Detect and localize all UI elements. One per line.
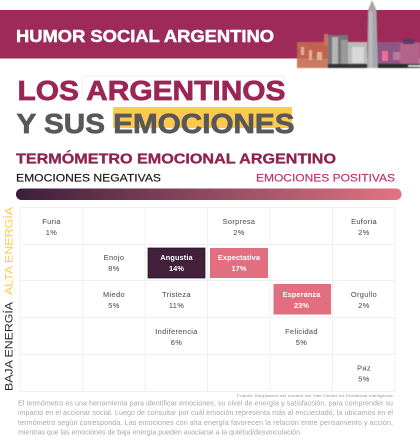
cell: Sorpresa: 2%: [233, 228, 245, 237]
axis label: high energy: ALTA ENERGÍA: [2, 206, 16, 295]
cell: Tristeza: [162, 290, 191, 310]
explanatory paragraph: impacto en el accionar social. Luego de consultar por cuál emoción representa más al encuestado, la ubicamos en el: [18, 409, 393, 417]
main title line 2: Y SUS EMOCIONES: [16, 108, 294, 139]
icon: Buenos Aires skyline with obelisk: [297, 0, 420, 68]
cell: Expectativa: [210, 248, 268, 278]
cell: Indiferencia: [155, 327, 198, 347]
label: negative emotions: EMOCIONES NEGATIVAS: [16, 172, 161, 184]
cell: Esperanza: [274, 284, 331, 314]
cell: Miedo: [103, 290, 125, 310]
cell: Paz: 5%: [358, 374, 370, 384]
cell: Euforia: 2%: [358, 228, 370, 237]
cell: Felicidad: Felicidad: [285, 327, 318, 336]
cell: Esperanza: 23%: [294, 301, 309, 310]
cell: Indiferencia: Indiferencia: [155, 327, 198, 336]
section heading: TERMÓMETRO EMOCIONAL ARGENTINO: [16, 150, 336, 168]
header title: HUMOR SOCIAL ARGENTINO: [16, 26, 274, 46]
cell: Angustia: Angustia: [160, 253, 193, 262]
cell: Angustia: [148, 248, 205, 278]
cell: Expectativa: Expectativa: [218, 253, 261, 262]
cell: Enojo: Enojo: [104, 253, 124, 262]
axis label: low energy: BAJA ENERGÍA: [2, 301, 16, 391]
cell: Furia: 1%: [46, 228, 57, 237]
cell: Furia: [42, 217, 61, 237]
cell: Miedo: Miedo: [103, 290, 125, 299]
cell: Angustia: 14%: [169, 264, 184, 273]
cell: Tristeza: 11%: [169, 301, 184, 310]
emotion grid: [20, 208, 395, 392]
cell: Sorpresa: [223, 217, 256, 237]
source note: Fuente: Adaptación del modelo del Yale Center for Emotional Intelligence: [237, 394, 393, 398]
cell: Paz: [357, 364, 371, 384]
main title line 1: LOS ARGENTINOS: [18, 75, 286, 106]
cell: Miedo: 5%: [108, 301, 120, 310]
cell: Indiferencia: 6%: [171, 338, 182, 347]
explanatory paragraph: mientras que las emociones de baja energía pueden asociarse a la quietud/desvinculación.: [18, 428, 302, 436]
cell: Orgullo: 2%: [358, 301, 370, 310]
cell: Orgullo: Orgullo: [351, 290, 377, 299]
explanatory paragraph: termómetro según corresponda. Las emociones con alta energía favorecen la relación entre pensamiento y acción,: [18, 419, 393, 427]
cell: Furia: Furia: [42, 217, 61, 226]
cell: Euforia: [351, 217, 377, 237]
cell: Felicidad: 5%: [296, 338, 307, 347]
cell: Orgullo: [351, 290, 377, 310]
cell: Sorpresa: Sorpresa: [223, 217, 256, 226]
cell: Felicidad: [285, 327, 318, 347]
explanatory paragraph: El termómetro es una herramienta para identificar emociones, su nivel de energía y satisfacción, para comprender su: [18, 400, 393, 408]
cell: Euforia: Euforia: [351, 217, 377, 226]
gradient scale bar: [16, 188, 402, 200]
explanatory paragraph: [18, 400, 393, 436]
header band: [0, 10, 420, 58]
cell: Enojo: [104, 253, 124, 273]
cell: Expectativa: 17%: [231, 264, 247, 273]
cell: Enojo: 8%: [108, 264, 120, 273]
cell: Paz: Paz: [357, 364, 371, 372]
label: positive emotions: EMOCIONES POSITIVAS: [256, 172, 395, 184]
cell: Esperanza: Esperanza: [283, 290, 321, 299]
cell: Tristeza: Tristeza: [162, 290, 191, 299]
